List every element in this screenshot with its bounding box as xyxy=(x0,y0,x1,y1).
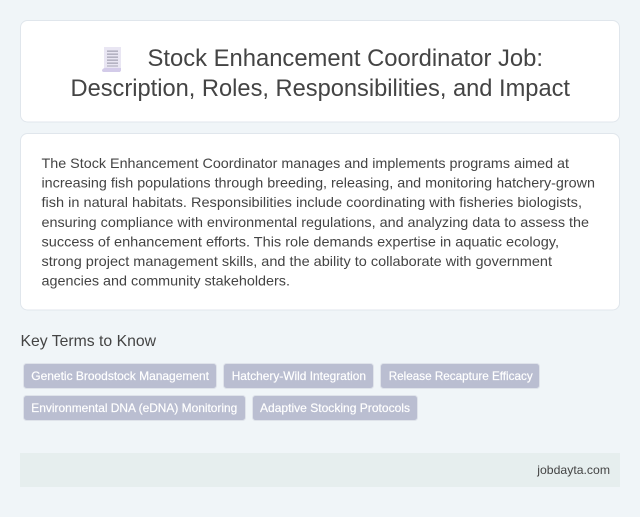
description text: fish in natural habitats. Responsibilities include coordinating with fisheries biologists, xyxy=(42,194,582,210)
description text xyxy=(42,155,595,289)
chip: adaptive stocking protocols xyxy=(252,396,418,420)
chip: genetic broodstock management: Genetic Broodstock Management xyxy=(31,369,210,383)
chip: genetic broodstock management xyxy=(24,364,216,388)
key term chips xyxy=(24,364,540,420)
chip: hatchery-wild integration xyxy=(224,364,374,388)
description text: The Stock Enhancement Coordinator manages and implements programs aimed at xyxy=(42,155,569,171)
footer bar xyxy=(20,453,620,487)
chip: release recapture efficacy xyxy=(380,364,540,388)
title xyxy=(70,45,570,102)
icon: document xyxy=(102,47,121,72)
description text: strong project management skills, and the ability to collaborate with government xyxy=(42,253,552,269)
title: Description, Roles, Responsibilities, and Impact xyxy=(70,75,570,102)
chip: release recapture efficacy: Release Recapture Efficacy xyxy=(389,369,533,383)
chip: environmental dna monitoring: Environmental DNA (eDNA) Monitoring xyxy=(31,401,237,415)
chip: environmental dna monitoring xyxy=(24,396,246,420)
heading: key terms: Key Terms to Know xyxy=(20,333,156,350)
description text: agencies and community stakeholders. xyxy=(42,273,290,289)
description text: success of enhancement efforts. This role demands expertise in aquatic ecology, xyxy=(42,233,559,249)
title: Stock Enhancement Coordinator Job: xyxy=(148,45,543,72)
description text: ensuring compliance with environmental regulations, and analyzing data to assess the xyxy=(42,214,589,230)
panel: title card xyxy=(20,20,620,122)
chip: adaptive stocking protocols: Adaptive Stocking Protocols xyxy=(260,401,410,415)
panel: description xyxy=(20,134,620,310)
footer bar: jobdayta.com xyxy=(536,463,610,477)
chip: hatchery-wild integration: Hatchery-Wild Integration xyxy=(232,369,366,383)
description text: increasing fish populations through breeding, releasing, and monitoring hatchery-grown xyxy=(42,175,595,191)
